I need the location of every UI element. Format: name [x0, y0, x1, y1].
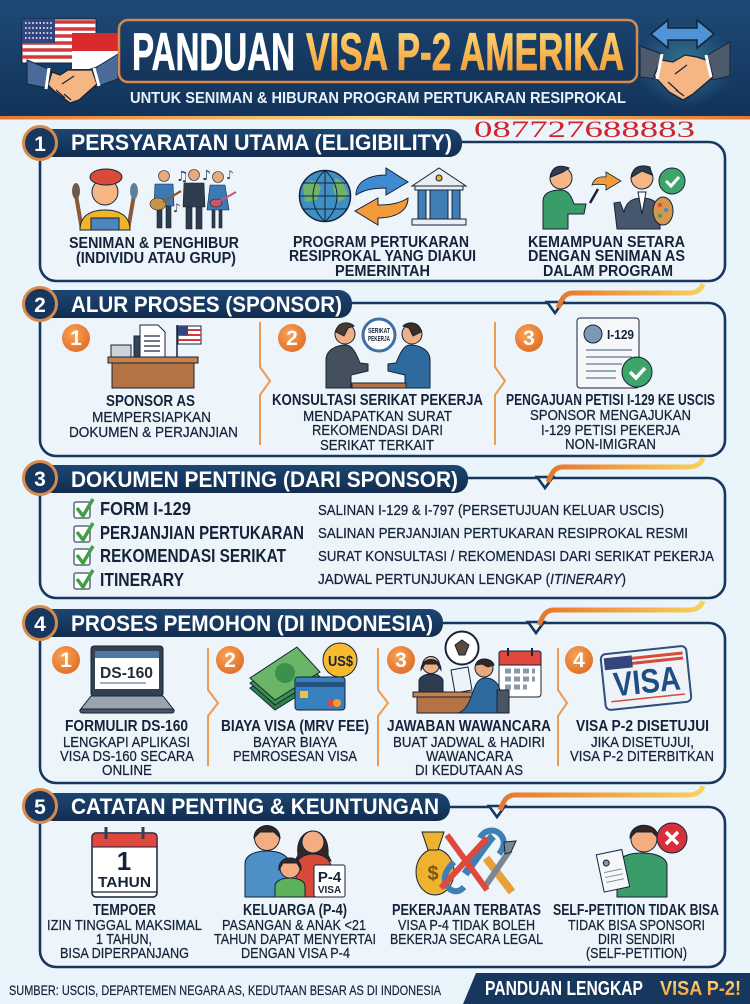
text: kemampuan setara — [528, 234, 685, 280]
source note: SUMBER: USCIS, DEPARTEMEN NEGARA AS, KEDUTAAN BESAR AS DI INDONESIA — [9, 983, 441, 998]
text: step 3: NON-IMIGRAN — [565, 436, 656, 453]
heading: section 2 — [24, 288, 352, 320]
step badge 4 — [565, 646, 593, 674]
text: step 1: ONLINE — [102, 762, 152, 779]
text: keluarga: KELUARGA (P-4) — [243, 902, 347, 919]
text: step 1: VISA DS-160 SECARA — [60, 748, 194, 765]
text: keluarga — [214, 902, 376, 962]
subtitle: UNTUK SENIMAN & HIBURAN PROGRAM PERTUKARAN RESIPROKAL — [130, 90, 626, 107]
step divider chevrons — [260, 322, 505, 445]
icon: band: ♪ — [202, 168, 211, 184]
heading: section 4 — [24, 606, 443, 640]
footer banner: PANDUAN LENGKAP — [485, 978, 643, 1000]
icon: I-129 form — [577, 318, 652, 388]
step badge 3: 3 — [395, 649, 407, 672]
text: tempoer: TEMPOER — [93, 902, 156, 919]
text: self petition: DIRI SENDIRI — [598, 931, 675, 948]
text: tempoer — [47, 902, 202, 962]
heading: section 1: 1 — [34, 133, 46, 156]
text: step 3: JAWABAN WAWANCARA — [387, 718, 551, 735]
text: step 3: BUAT JADWAL & HADIRI — [393, 734, 545, 751]
icon: union consultation: PEKERJA — [368, 336, 390, 343]
text: pekerjaan terbatas: PEKERJAAN TERBATAS — [392, 902, 541, 919]
icon: visa card: VISA — [612, 660, 682, 704]
icon: laptop DS-160: DS-160 — [100, 665, 153, 682]
text: program pertukaran — [289, 234, 476, 280]
text: step 1: SPONSOR AS — [106, 393, 195, 410]
phone number: 087727688883 — [474, 117, 695, 142]
title text: PANDUAN — [132, 23, 295, 82]
text: seniman dan penghibur — [69, 235, 239, 267]
title box — [119, 20, 637, 82]
icon: restricted work — [416, 831, 516, 895]
header banner — [0, 0, 750, 120]
checklist row: itinerary — [74, 570, 184, 590]
ribbon accent — [547, 284, 703, 313]
text: self petition — [553, 902, 719, 962]
step badge 2 — [278, 324, 306, 352]
heading: section 3: 3 — [34, 468, 46, 491]
text: tempoer: IZIN TINGGAL MAKSIMAL — [47, 917, 202, 934]
panel: proses pemohon — [24, 601, 725, 783]
text: step 1: DOKUMEN & PERJANJIAN — [69, 424, 238, 441]
ribbon accent — [537, 458, 703, 488]
icon: visa card — [600, 646, 692, 710]
ribbon accent — [528, 601, 703, 633]
icon: calendar one year — [92, 827, 157, 897]
document descriptions: SALINAN PERJANJIAN PERTUKARAN RESIPROKAL RESMI — [318, 525, 688, 542]
step badge 3 — [387, 646, 415, 674]
footer banner — [463, 973, 750, 1004]
icon: interview at embassy — [413, 632, 541, 713]
panel: alur proses — [24, 284, 725, 456]
text: program pertukaran: PROGRAM PERTUKARAN — [293, 234, 469, 251]
heading: section 2: ALUR PROSES (SPONSOR) — [71, 292, 342, 317]
step divider chevrons — [208, 648, 567, 766]
heading: section 1 — [24, 126, 462, 160]
panel: catatan penting — [24, 786, 725, 967]
icon: artist — [72, 169, 138, 230]
step badge 3 — [515, 324, 543, 352]
icon: left handshake — [27, 54, 118, 103]
text: tempoer: 1 TAHUN, — [96, 931, 152, 948]
icon: money and card: US$ — [328, 653, 354, 670]
icon: sponsor desk — [108, 325, 201, 388]
step badge 3: 3 — [523, 327, 535, 350]
text: self petition: (SELF-PETITION) — [586, 945, 687, 962]
step badge 1: 1 — [60, 649, 72, 672]
text: step 2: REKOMENDASI DARI — [312, 422, 443, 439]
document descriptions: SALINAN I-129 & I-797 (PERSETUJUAN KELUAR USCIS) — [318, 502, 664, 519]
icon: family with P-4 visa — [245, 826, 345, 897]
heading: section 4: 4 — [34, 613, 46, 636]
text: step 3 — [506, 392, 715, 453]
text: keluarga: PASANGAN & ANAK <21 — [222, 917, 366, 934]
icon: two way arrow — [651, 20, 714, 48]
text: keluarga: DENGAN VISA P-4 — [241, 945, 350, 962]
footer banner: VISA P-2! — [660, 978, 741, 1000]
text: step 3: I-129 PETISI PEKERJA — [541, 422, 680, 439]
text: step 1: FORMULIR DS-160 — [65, 718, 188, 735]
icon: band: ♪ — [173, 201, 181, 215]
text: step 3: SPONSOR MENGAJUKAN — [530, 407, 691, 424]
icon: exchange arrows — [355, 168, 408, 225]
text: step 3: DI KEDUTAAN AS — [415, 762, 523, 779]
text: step 2: PEMROSESAN VISA — [233, 748, 357, 765]
icon: government building — [412, 168, 466, 225]
icon: artist and US peer — [543, 166, 685, 229]
icon: globe — [300, 170, 350, 222]
icon: band: ♪ — [226, 168, 234, 182]
text: step 2: MENDAPATKAN SURAT — [303, 408, 452, 425]
text: seniman dan penghibur: SENIMAN & PENGHIBUR — [69, 235, 239, 252]
text: step 1 — [60, 718, 194, 779]
step badge 1: 1 — [70, 327, 82, 350]
text: pekerjaan terbatas: BEKERJA SECARA LEGAL — [390, 931, 543, 948]
icon: money and card — [250, 643, 357, 710]
icon: calendar one year: 1 — [117, 846, 131, 876]
icon: band — [150, 168, 236, 229]
heading: section 5: CATATAN PENTING & KEUNTUNGAN — [71, 794, 439, 819]
text: step 3: WAWANCARA — [426, 748, 513, 765]
text: step 4 — [570, 718, 714, 765]
text: step 4: VISA P-2 DISETUJUI — [576, 718, 709, 735]
text: pekerjaan terbatas: VISA P-4 TIDAK BOLEH — [398, 917, 535, 934]
checklist row: form I-129: FORM I-129 — [100, 499, 191, 519]
text: step 1 — [69, 393, 238, 441]
text: step 2: BIAYA VISA (MRV FEE) — [221, 718, 369, 735]
text: kemampuan setara: DENGAN SENIMAN AS — [528, 248, 685, 265]
icon: union consultation — [326, 319, 430, 388]
step badge 2: 2 — [224, 649, 236, 672]
text: seniman dan penghibur: (INDIVIDU ATAU GRUP) — [76, 250, 236, 267]
text: keluarga: TAHUN DAPAT MENYERTAI — [214, 931, 376, 948]
text: step 2 — [272, 392, 483, 454]
step badge 4: 4 — [573, 649, 585, 672]
text: step 3 — [387, 718, 551, 779]
heading: section 3 — [24, 462, 468, 494]
step badge 1 — [52, 646, 80, 674]
step badge 1 — [62, 324, 90, 352]
panel: persyaratan utama — [24, 126, 725, 281]
panel: dokumen penting — [24, 458, 725, 598]
text: step 4: JIKA DISETUJUI, — [591, 734, 694, 751]
text: step 2 — [221, 718, 369, 765]
heading: section 2: 2 — [34, 294, 46, 317]
checklist row: itinerary: ITINERARY — [100, 570, 184, 590]
document descriptions: JADWAL PERTUNJUKAN LENGKAP (ITINERARY) — [318, 571, 626, 588]
heading: section 5: 5 — [34, 796, 46, 819]
text: step 2: SERIKAT TERKAIT — [320, 437, 434, 454]
step badge 2: 2 — [286, 327, 298, 350]
heading: section 1: PERSYARATAN UTAMA (ELIGIBILITY) — [71, 130, 452, 155]
text: program pertukaran: RESIPROKAL YANG DIAKUI — [289, 248, 476, 265]
text: step 1: LENGKAPI APLIKASI — [63, 734, 190, 751]
checklist row: rekomendasi: REKOMENDASI SERIKAT — [100, 546, 286, 566]
icon: US and Indonesia flags — [22, 19, 119, 69]
document descriptions — [318, 502, 714, 588]
ribbon accent — [489, 786, 703, 817]
icon: band: ♫ — [176, 169, 189, 185]
text: kemampuan setara: KEMAMPUAN SETARA — [528, 234, 685, 251]
text: self petition: TIDAK BISA SPONSORI — [568, 917, 705, 934]
step badge 2 — [216, 646, 244, 674]
text: program pertukaran: PEMERINTAH — [335, 263, 430, 280]
icon: union consultation: SERIKAT — [368, 328, 391, 335]
icon: family with P-4 visa: P-4 — [318, 869, 342, 886]
text: tempoer: BISA DIPERPANJANG — [60, 945, 189, 962]
text: step 2: KONSULTASI SERIKAT PEKERJA — [272, 392, 483, 409]
icon: I-129 form: I-129 — [607, 327, 634, 342]
icon: laptop DS-160 — [80, 646, 174, 713]
icon: restricted work: $ — [427, 863, 439, 885]
text: step 4: VISA P-2 DITERBITKAN — [570, 748, 714, 765]
icon: right handshake — [640, 42, 730, 100]
text: step 2: BAYAR BIAYA — [253, 734, 337, 751]
text: pekerjaan terbatas — [390, 902, 543, 948]
icon: calendar one year: TAHUN — [98, 874, 151, 891]
heading: section 5 — [24, 790, 450, 822]
heading: section 3: DOKUMEN PENTING (DARI SPONSOR) — [71, 467, 458, 492]
heading: section 4: PROSES PEMOHON (DI INDONESIA) — [71, 611, 433, 636]
text: kemampuan setara: DALAM PROGRAM — [543, 263, 673, 280]
icon: self petition denied — [596, 823, 687, 897]
text: step 1: MEMPERSIAPKAN — [92, 409, 211, 426]
icon: family with P-4 visa: VISA — [318, 885, 341, 896]
checklist row: perjanjian: PERJANJIAN PERTUKARAN — [100, 523, 304, 543]
